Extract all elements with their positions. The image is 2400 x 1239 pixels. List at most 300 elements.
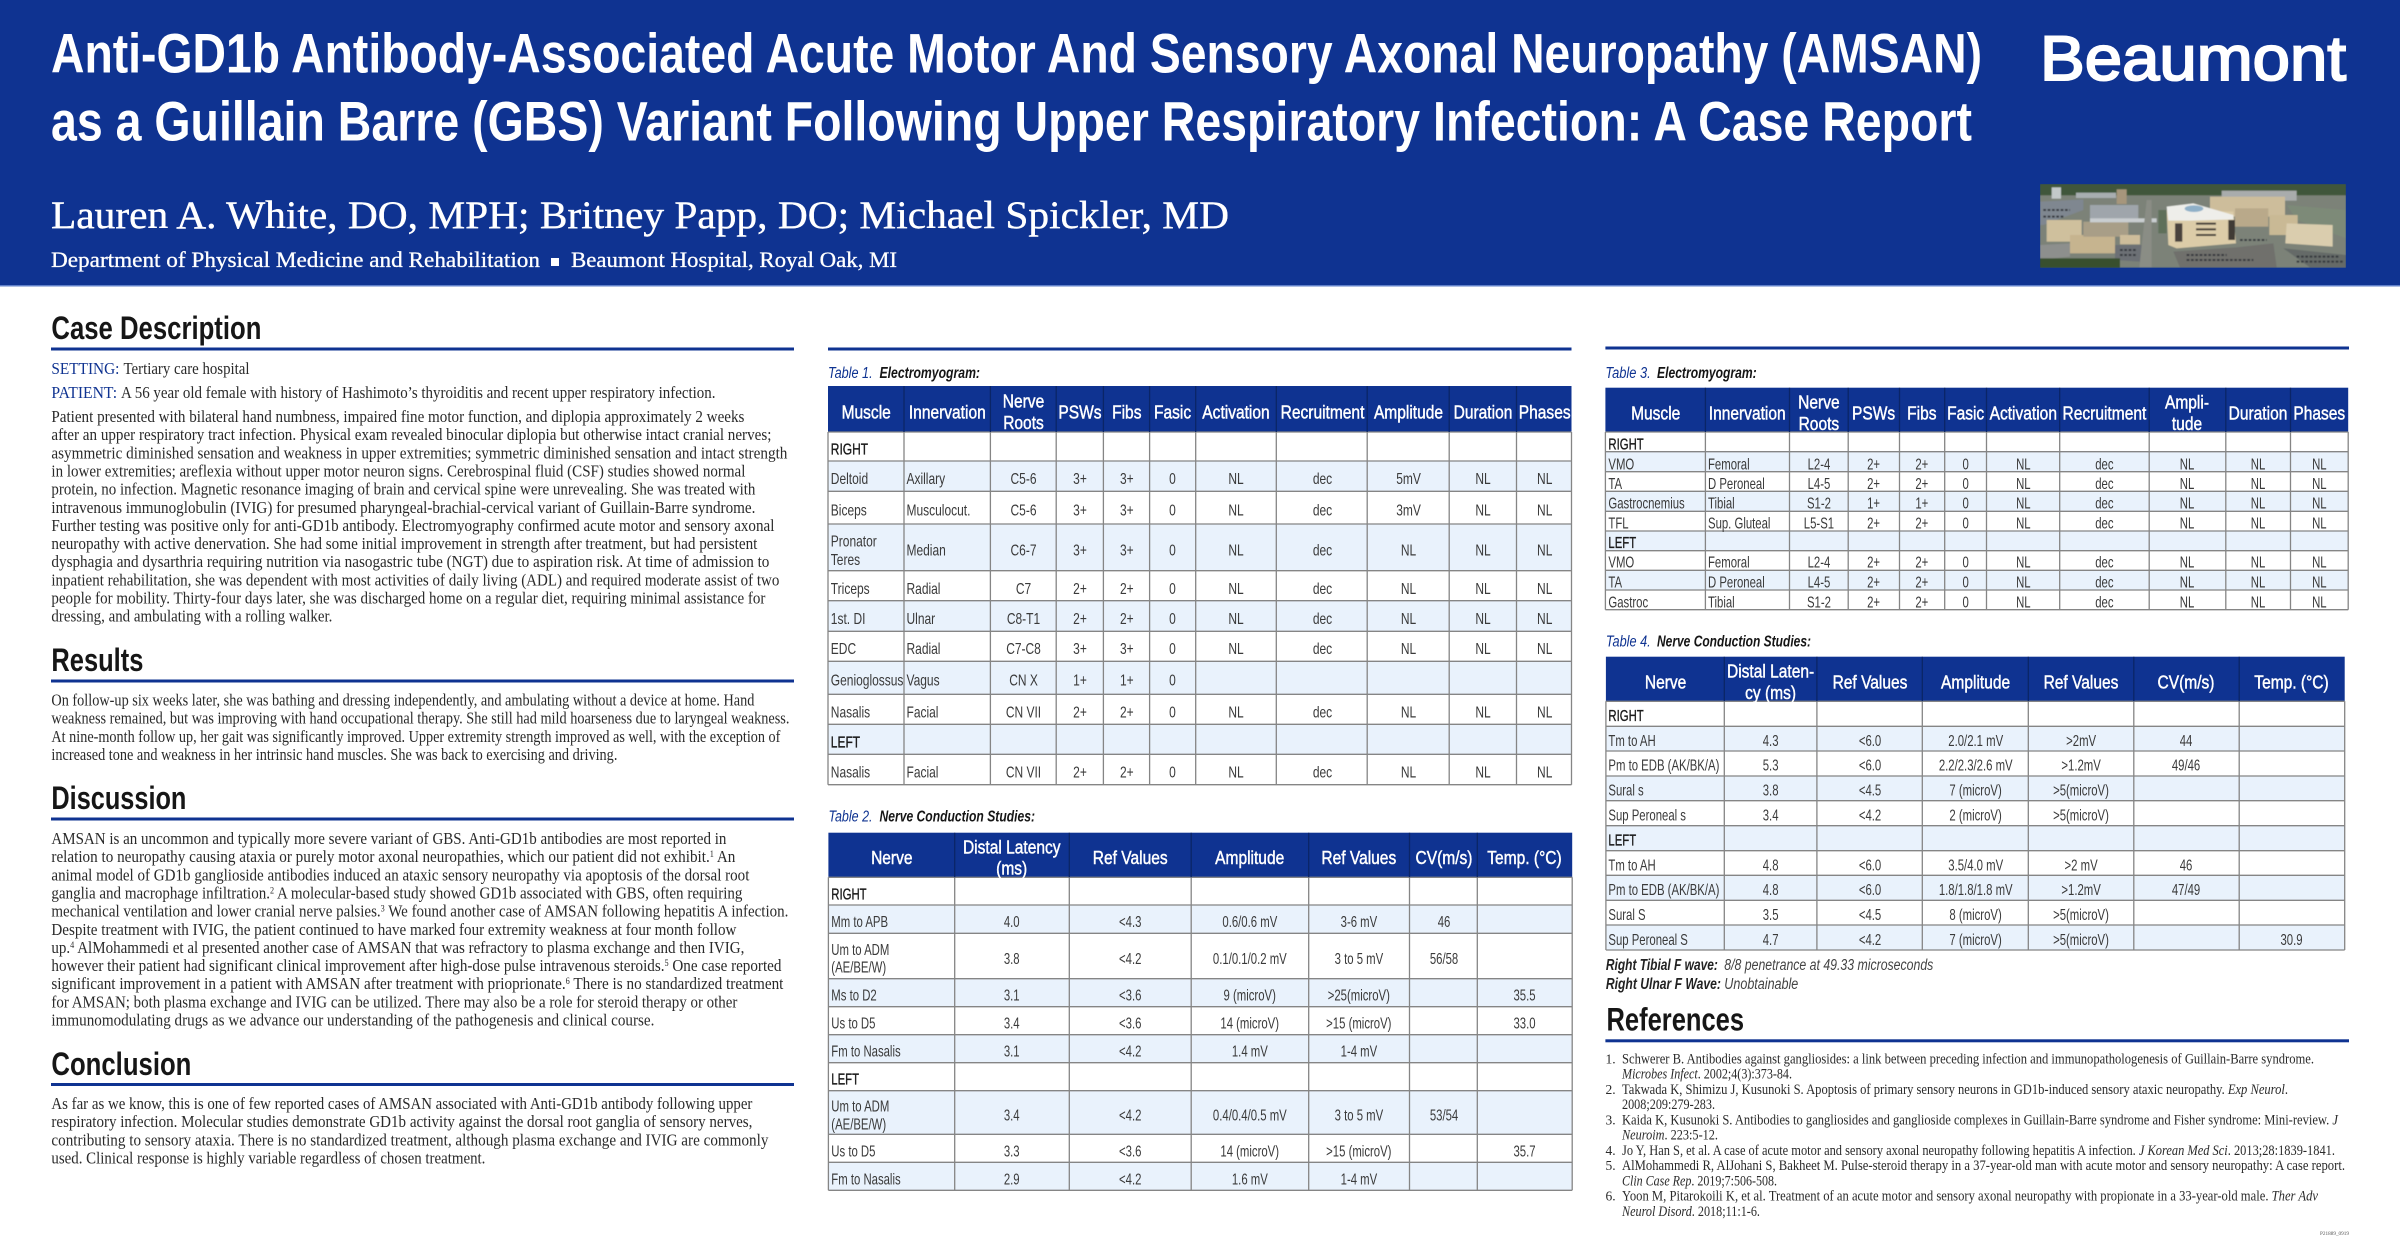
case narrative: Further testing was positive only for anti-GD1b antibody. Electromyography confirmed acute motor and sensory axonal xyxy=(51,516,775,535)
table 2 header row: Nerve xyxy=(871,848,913,868)
heading: Conclusion: Conclusion xyxy=(51,1046,191,1082)
table 4 body rows: Sup Peroneal S xyxy=(1608,930,1688,948)
table 1 body rows: CN VII xyxy=(1006,763,1041,781)
table 1 body rows: NL xyxy=(1228,501,1244,519)
table 2 body rows: Um to ADM xyxy=(831,940,889,958)
table 4 body rows: >5(microV) xyxy=(2053,781,2109,799)
table 4 body rows: >5(microV) xyxy=(2053,905,2109,923)
table 3 body rows: Femoral xyxy=(1708,454,1750,473)
table 1 header row: Nerve xyxy=(1003,391,1044,412)
table 4 body rows: <6.0 xyxy=(1859,731,1881,749)
table 3 header row: Fasic xyxy=(1947,403,1985,424)
table 1 body rows: Deltoid xyxy=(831,469,868,487)
table 4 body rows: 5.3 xyxy=(1763,756,1779,774)
table 2 body rows: 3.3 xyxy=(1004,1141,1020,1160)
table 3 body rows: LEFT xyxy=(1608,533,1637,551)
reference list: Neuroim. 223:5-12. xyxy=(1621,1128,1718,1144)
table 3 body rows: NL xyxy=(2251,592,2266,611)
table 3 body rows: 2+ xyxy=(1915,474,1928,492)
discussion text: We found another case of AMSAN following hepatitis A infection. xyxy=(385,902,788,921)
reference list: Microbes Infect. 2002;4(3):373-84. xyxy=(1621,1067,1792,1083)
table 2 body rows: (AE/BE/W) xyxy=(831,958,886,976)
table 1 body rows: NL xyxy=(1475,541,1491,559)
table 2 body rows xyxy=(831,884,1536,1188)
patient line: PATIENT: xyxy=(51,383,117,402)
table 4 body rows: >2mV xyxy=(2066,731,2097,749)
table 3 body rows: RIGHT xyxy=(1608,434,1644,453)
table 1 body rows: dec xyxy=(1313,469,1332,487)
table 1 body rows: NL xyxy=(1475,501,1491,519)
table 1 body rows: 5mV xyxy=(1396,469,1421,487)
table 4 body rows: 44 xyxy=(2180,731,2193,749)
discussion text: 6 xyxy=(566,976,570,986)
table 3 body rows: 2+ xyxy=(1915,573,1928,591)
table 2 body rows: <3.6 xyxy=(1119,986,1142,1004)
table 1 body rows: NL xyxy=(1475,609,1491,627)
case narrative: people for mobility. Thirty-four days later, she was discharged home on a regular diet, requiring minimal assistance for xyxy=(51,588,766,608)
table 2 body rows: 1.6 mV xyxy=(1232,1169,1268,1188)
table 4 body rows: 47/49 xyxy=(2172,880,2200,898)
table 3 body rows: Sup. Gluteal xyxy=(1708,513,1770,532)
table 1 header row xyxy=(842,391,1571,433)
discussion text: AMSAN is an uncommon and typically more severe variant of GBS. Anti-GD1b antibodies are most reported in xyxy=(51,829,726,848)
table 1 body rows: Genioglossus xyxy=(831,671,903,689)
table 3 body rows: Gastrocnemius xyxy=(1608,494,1685,512)
discussion text: 3 xyxy=(381,904,385,914)
case narrative: in lower extremities; areflexia without upper motor neuron signs. Cerebrospinal fluid (CSF) studies showed normal xyxy=(51,461,746,480)
table 1: electromyogram xyxy=(828,386,1572,785)
table 4 body rows: <4.5 xyxy=(1859,905,1881,923)
heading: Results: Results xyxy=(51,642,143,678)
table 3 body rows: NL xyxy=(2312,474,2327,492)
table 1 body rows: Triceps xyxy=(831,579,870,597)
reference list: Jo Y, Han S, et al. A case of acute motor and sensory axonal neuropathy following hepatitis A infection. J Korean Med Sci. 2013;28:1839-1841. xyxy=(1622,1143,2335,1159)
table 2 body rows: RIGHT xyxy=(831,884,867,903)
table 3 body rows: VMO xyxy=(1608,553,1634,571)
table 3 body rows: TA xyxy=(1608,474,1623,492)
table 1 body rows: NL xyxy=(1537,579,1553,597)
table 2 header row: Ref Values xyxy=(1093,848,1168,868)
discussion text: 5 xyxy=(664,958,669,968)
table 3 body rows: NL xyxy=(2180,474,2195,492)
table 3 header row: Roots xyxy=(1799,414,1839,434)
table 1 body rows: 2+ xyxy=(1073,579,1087,597)
table 4 header row: Amplitude xyxy=(1941,672,2010,693)
results text: At nine-month follow up, her gait was significantly improved. Upper extremity strength improved as well, with the exception of xyxy=(51,727,781,746)
table 2 body rows: 35.7 xyxy=(1514,1141,1536,1160)
table 4 body rows: 3.5/4.0 mV xyxy=(1948,855,2004,874)
table 2 body rows: 4.0 xyxy=(1004,912,1020,930)
table 2 body rows: 0.4/0.4/0.5 mV xyxy=(1213,1105,1287,1124)
discussion text: immunomodulating drugs as we advance our understanding of the pathogenesis and clinical course. xyxy=(51,1010,654,1030)
table 1 body rows: 1+ xyxy=(1120,671,1134,689)
table 1 body rows: NL xyxy=(1228,763,1244,781)
table 4 body rows: 4.7 xyxy=(1763,930,1779,948)
setting line: Tertiary care hospital xyxy=(124,359,250,378)
table 1 body rows: 2+ xyxy=(1120,703,1134,721)
table 1 body rows: 3+ xyxy=(1073,541,1087,559)
table 3 body rows: S1-2 xyxy=(1807,494,1831,512)
reference list: Clin Case Rep. 2019;7:506-508. xyxy=(1622,1173,1777,1189)
table 4 body rows: 49/46 xyxy=(2172,756,2200,774)
table 3 body rows: NL xyxy=(2016,592,2031,611)
table 2 header row: Amplitude xyxy=(1215,848,1284,868)
table 1 body rows: Nasalis xyxy=(831,703,870,721)
table 3 body rows xyxy=(1608,434,2327,611)
table 4 body rows: Pm to EDB (AK/BK/A) xyxy=(1608,880,1719,898)
table 1 body rows: Pronator xyxy=(831,532,877,550)
table 4 body rows: >5(microV) xyxy=(2053,806,2109,824)
table 4 body rows: Tm to AH xyxy=(1608,855,1656,874)
table 3 body rows: NL xyxy=(2312,573,2327,591)
table 4 body rows: Tm to AH xyxy=(1608,731,1656,749)
discussion text: for AMSAN; both plasma exchange and IVIG can be utilized. There may also be a role for steroid therapy or other xyxy=(51,992,738,1011)
table 3 body rows: 2+ xyxy=(1915,513,1928,532)
caption: table 4: Table 4. xyxy=(1606,634,1651,651)
table 4 body rows: 3.5 xyxy=(1763,905,1779,923)
table 4 body rows: 46 xyxy=(2180,855,2193,874)
table 3 body rows: NL xyxy=(2312,454,2327,473)
discussion text: mechanical ventilation and lower cranial nerve palsies. xyxy=(51,902,414,921)
table 1 body rows: NL xyxy=(1537,469,1553,487)
table 1 body rows: NL xyxy=(1228,579,1244,597)
table 1 body rows: NL xyxy=(1401,763,1416,781)
table 1 header row: Fasic xyxy=(1154,402,1192,423)
discussion text: 4 xyxy=(70,940,75,950)
table 2 body rows: 2.9 xyxy=(1004,1169,1020,1188)
table 4 body rows: >1.2mV xyxy=(2061,880,2101,898)
table 2 body rows: Us to D5 xyxy=(831,1141,876,1160)
caption: table 3: Electromyogram: xyxy=(1657,365,1757,382)
table 1 body rows: NL xyxy=(1401,541,1416,559)
table 1 body rows: Teres xyxy=(831,550,860,568)
table 2: nerve conduction studies xyxy=(828,833,1572,1190)
F wave notes xyxy=(1606,957,1933,993)
affiliation: Beaumont Hospital, Royal Oak, MI xyxy=(571,247,897,272)
case narrative: asymmetric diminished sensation and weakness in upper extremities; symmetric diminished sensation and intact strength xyxy=(51,443,788,462)
table 3 body rows: Gastroc xyxy=(1608,592,1648,611)
table 4 header row: Nerve xyxy=(1645,672,1686,693)
table 1 body rows: 3+ xyxy=(1073,639,1087,657)
table 4: nerve conduction studies xyxy=(1606,657,2345,950)
table 2 body rows: 0.1/0.1/0.2 mV xyxy=(1213,949,1287,967)
conclusion text xyxy=(51,1094,769,1167)
table 2 body rows: Um to ADM xyxy=(831,1096,889,1115)
table 2 body rows: 9 (microV) xyxy=(1224,986,1276,1004)
discussion text: animal model of GD1b ganglioside antibodies induced an ataxic sensory neuropathy via apoptosis of the dorsal root xyxy=(51,865,750,884)
table 4 body rows: <6.0 xyxy=(1859,855,1881,874)
panel: results xyxy=(51,642,794,764)
table 2 body rows: >15 (microV) xyxy=(1326,1014,1391,1032)
results text: On follow-up six weeks later, she was bathing and dressing independently, and ambulating without a device at home. Hand xyxy=(51,690,755,710)
table 4 body rows: >1.2mV xyxy=(2061,756,2101,774)
caption: table 4 xyxy=(1606,634,1811,651)
results text: weakness remained, but was improving with hand occupational therapy. She still had mild hoarseness due to laryngeal weakness. xyxy=(51,709,789,728)
table 1 body rows: 0 xyxy=(1169,541,1176,559)
table 2 body rows: 3.4 xyxy=(1004,1014,1020,1032)
table 3 body rows: NL xyxy=(2180,454,2195,473)
table 4 body rows: Sup Peroneal s xyxy=(1608,806,1686,824)
table 4 header row xyxy=(1645,661,2329,703)
table 4 header row: cy (ms) xyxy=(1745,683,1796,703)
table 2 body rows: 46 xyxy=(1438,912,1451,930)
table 2 body rows: >25(microV) xyxy=(1328,986,1390,1004)
table 4 body rows: 7 (microV) xyxy=(1949,930,2002,948)
table 1 body rows: 3+ xyxy=(1120,469,1134,487)
table 2 header row xyxy=(871,837,1562,879)
caption: table 4: Nerve Conduction Studies: xyxy=(1657,634,1811,651)
table 1 body rows: Axillary xyxy=(906,469,946,487)
table 4 body rows: Sural S xyxy=(1608,905,1646,923)
header banner xyxy=(0,0,2400,286)
table 1 body rows: NL xyxy=(1537,763,1553,781)
table 2 body rows: 1-4 mV xyxy=(1341,1042,1378,1060)
table 1 body rows: Vagus xyxy=(906,671,940,689)
table 2 body rows: 14 (microV) xyxy=(1220,1014,1279,1032)
table 1 body rows xyxy=(831,440,1552,781)
case narrative: inpatient rehabilitation, she was dependent with most activities of daily living (ADL) and required moderate assist of two xyxy=(51,570,779,589)
table 3 body rows: L4-5 xyxy=(1808,474,1831,492)
F wave notes: 8/8 penetrance at 49.33 microseconds xyxy=(1724,957,1933,974)
F wave notes: Right Tibial F wave: xyxy=(1606,957,1718,974)
F wave notes: Right Ulnar F Wave: xyxy=(1606,976,1721,993)
table 1 body rows: dec xyxy=(1313,703,1332,721)
table 1 body rows: NL xyxy=(1401,639,1416,657)
table 1 body rows: NL xyxy=(1228,541,1244,559)
table 1 body rows: NL xyxy=(1401,579,1416,597)
table 1 header row: Innervation xyxy=(909,402,986,423)
table 3 body rows: NL xyxy=(2312,553,2327,571)
table 4 body rows: 3.8 xyxy=(1763,781,1779,799)
table 4 body rows: 2.2/2.3/2.6 mV xyxy=(1939,756,2013,774)
setting line xyxy=(51,359,250,378)
table 2 body rows: <4.2 xyxy=(1119,949,1142,967)
table 2 header row: (ms) xyxy=(996,858,1027,879)
heading: Discussion: Discussion xyxy=(51,780,186,816)
table 1 body rows: dec xyxy=(1313,639,1332,657)
table 3 header row xyxy=(1631,392,2345,434)
table 2 body rows: 3 to 5 mV xyxy=(1335,949,1384,967)
table 3 body rows: L4-5 xyxy=(1808,573,1831,591)
panel: case description xyxy=(51,310,794,626)
table 1 body rows: Facial xyxy=(906,703,938,721)
table 2 header row: Distal Latency xyxy=(963,837,1061,858)
results text: increased tone and weakness in her intrinsic hand muscles. She was back to exercising and driving. xyxy=(51,745,617,764)
table 4 header row: Ref Values xyxy=(1833,672,1907,693)
conclusion text: As far as we know, this is one of few reported cases of AMSAN associated with Anti-GD1b antibody following upper xyxy=(51,1094,753,1113)
panel: conclusion xyxy=(51,1046,794,1167)
table 1 body rows: C8-T1 xyxy=(1007,609,1040,627)
discussion text: An xyxy=(714,847,735,866)
table 2 body rows: Fm to Nasalis xyxy=(831,1169,901,1188)
caption: table 2: Table 2. xyxy=(828,809,872,826)
table 3 body rows: NL xyxy=(2251,494,2266,512)
table 1 body rows: 3+ xyxy=(1073,469,1087,487)
table 1 body rows: NL xyxy=(1475,579,1491,597)
table 1 body rows: 0 xyxy=(1169,763,1176,781)
table 3 body rows: Femoral xyxy=(1708,553,1750,571)
discussion text: however their patient had significant clinical improvement after high-dose pulse intravenous steroids. xyxy=(51,956,721,975)
case narrative: intravenous immunoglobulin (IVIG) for presumed pharyngeal-brachial-cervical variant of Guillain-Barre syndrome. xyxy=(51,498,755,517)
table 3 body rows: L5-S1 xyxy=(1804,513,1834,532)
panel: discussion xyxy=(51,780,794,1030)
table 4 body rows: 1.8/1.8/1.8 mV xyxy=(1939,880,2013,898)
table 2 body rows: <3.6 xyxy=(1119,1014,1142,1032)
table 1 body rows: 2+ xyxy=(1073,703,1087,721)
table 3 body rows: S1-2 xyxy=(1807,592,1831,611)
case narrative: Patient presented with bilateral hand numbness, impaired fine motor function, and diplopia approximately 2 weeks xyxy=(51,407,744,426)
table 3 body rows: dec xyxy=(2095,454,2114,473)
table 4 body rows: <6.0 xyxy=(1859,756,1881,774)
table 3 header row: Nerve xyxy=(1798,392,1840,413)
caption: table 1 xyxy=(828,365,980,382)
caption: table 1: Electromyogram: xyxy=(880,365,980,382)
table 2 body rows: >15 (microV) xyxy=(1326,1141,1391,1160)
caption: table 2 xyxy=(828,809,1035,826)
table 2 body rows: 56/58 xyxy=(1430,949,1458,967)
table 2 header row: Temp. (°C) xyxy=(1487,848,1562,868)
table 1 body rows: C7 xyxy=(1016,579,1031,597)
table 3 body rows: L2-4 xyxy=(1808,553,1831,571)
table 1 header row: Duration xyxy=(1454,402,1512,423)
table 2 body rows: LEFT xyxy=(831,1070,859,1088)
title: Anti-GD1b Antibody-Associated Acute Motor And Sensory Axonal Neuropathy (AMSAN) xyxy=(51,22,1982,84)
table 3 body rows: D Peroneal xyxy=(1708,573,1765,591)
table 1 body rows: 1st. DI xyxy=(831,609,865,627)
table 2 body rows: Ms to D2 xyxy=(831,986,877,1004)
table 3 body rows: D Peroneal xyxy=(1708,474,1765,492)
patient line: A 56 year old female with history of Hashimoto’s thyroiditis and recent upper respiratory infection. xyxy=(121,383,716,402)
table 4 body rows: 2.0/2.1 mV xyxy=(1948,731,2004,749)
table 1 body rows: NL xyxy=(1537,501,1553,519)
table 1 body rows: NL xyxy=(1228,609,1244,627)
discussion text: 2 xyxy=(270,885,274,895)
table 1 body rows: 0 xyxy=(1169,703,1176,721)
table 4 body rows: >5(microV) xyxy=(2053,930,2109,948)
table 3 body rows: Tibial xyxy=(1708,592,1735,611)
table 3 body rows: 0 xyxy=(1962,474,1969,492)
table 1 header row: Muscle xyxy=(842,402,891,423)
case narrative: dysphagia and dysarthria requiring nutrition via nasogastric tube (NGT) due to aspiration risk. At time of admission to xyxy=(51,552,769,571)
table 1 body rows: NL xyxy=(1228,703,1244,721)
table 4 body rows: Pm to EDB (AK/BK/A) xyxy=(1608,756,1719,774)
table 1 body rows: NL xyxy=(1228,639,1244,657)
table 4 body rows: 7 (microV) xyxy=(1949,781,2002,799)
table 1 body rows: C6-7 xyxy=(1011,541,1037,559)
reference list: 6. xyxy=(1606,1189,1616,1204)
table 1 header row: Phases xyxy=(1519,402,1571,423)
reference list xyxy=(1606,1051,2345,1220)
table 4 header row: Ref Values xyxy=(2044,672,2118,693)
table 3 body rows: 2+ xyxy=(1867,454,1880,473)
table 3 body rows: 0 xyxy=(1962,553,1969,571)
table 1 body rows: 0 xyxy=(1169,639,1176,657)
table 3 body rows: NL xyxy=(2016,513,2031,532)
table 3 body rows: 2+ xyxy=(1867,573,1880,591)
table 2 body rows: <4.2 xyxy=(1119,1042,1142,1060)
conclusion text: used. Clinical response is highly variable regardless of chosen treatment. xyxy=(51,1148,485,1167)
table 3 header row: Ampli- xyxy=(2165,392,2209,413)
table 1 body rows: Median xyxy=(906,541,946,559)
table 1 body rows: 3mV xyxy=(1396,501,1421,519)
discussion text: relation to neuropathy causing ataxia or purely motor axonal neuropathies, which our patient did not exhibit. xyxy=(51,847,768,866)
table 2 body rows: 1-4 mV xyxy=(1341,1169,1378,1188)
discussion text: ganglia and macrophage infiltration. xyxy=(51,883,291,902)
caption: table 3: Table 3. xyxy=(1605,365,1651,382)
table 2 body rows: 3.1 xyxy=(1004,1042,1020,1060)
print code: P21889_0919 xyxy=(2320,1232,2350,1237)
table 3 body rows: NL xyxy=(2312,592,2327,611)
table 4 body rows: 2 (microV) xyxy=(1949,806,2002,824)
table 2 body rows: 3-6 mV xyxy=(1341,912,1378,930)
caption: table 1: Table 1. xyxy=(828,365,873,382)
table 1 body rows: 3+ xyxy=(1073,501,1087,519)
table 3 body rows: 2+ xyxy=(1915,454,1928,473)
table 3 header row: PSWs xyxy=(1852,403,1895,424)
table 1 body rows: EDC xyxy=(831,639,856,657)
table 2 body rows: <4.2 xyxy=(1119,1169,1142,1188)
table 3 header row: Innervation xyxy=(1709,403,1786,424)
table 3 body rows: NL xyxy=(2180,553,2195,571)
table 2 body rows: 53/54 xyxy=(1430,1105,1458,1124)
table 4 body rows: LEFT xyxy=(1608,830,1637,849)
discussion text xyxy=(51,829,788,1030)
table 3 body rows: NL xyxy=(2016,573,2031,591)
table 3 body rows: 2+ xyxy=(1867,474,1880,492)
table 1 body rows: NL xyxy=(1228,469,1244,487)
table 1 body rows: Facial xyxy=(906,763,938,781)
table 1 body rows: 0 xyxy=(1169,579,1176,597)
table 4 body rows: 4.8 xyxy=(1763,855,1779,874)
table 2 body rows: <4.3 xyxy=(1119,912,1142,930)
table 3 body rows: 2+ xyxy=(1867,513,1880,532)
table 3 body rows: NL xyxy=(2251,573,2266,591)
table 1 body rows: 2+ xyxy=(1120,763,1134,781)
table 3 header row: Activation xyxy=(1990,403,2057,424)
affiliation xyxy=(51,247,897,272)
discussion text: significant improvement in a patient with AMSAN after treatment with prioprionate. xyxy=(51,974,610,993)
table 3 body rows: NL xyxy=(2180,513,2195,532)
discussion text: Despite treatment with IVIG, the patient continued to have marked four extremity weakness at four month follow xyxy=(51,920,736,939)
table 1 body rows: NL xyxy=(1475,703,1491,721)
table 1 body rows: RIGHT xyxy=(831,440,868,458)
table 4 body rows: RIGHT xyxy=(1608,706,1644,724)
heading: References: References xyxy=(1606,1002,1744,1038)
table 3 body rows: NL xyxy=(2180,573,2195,591)
table 3 body rows: NL xyxy=(2016,553,2031,571)
table 1 body rows: 3+ xyxy=(1120,501,1134,519)
results text xyxy=(51,690,789,764)
table 3 body rows: 0 xyxy=(1962,494,1969,512)
table 4 body rows xyxy=(1608,706,2303,948)
table 3 body rows: NL xyxy=(2312,494,2327,512)
authors: Lauren A. White, DO, MPH; Britney Papp, DO; Michael Spickler, MD xyxy=(51,194,1229,237)
table 1 body rows: 2+ xyxy=(1073,609,1087,627)
table 4 body rows: >2 mV xyxy=(2065,855,2098,874)
title: as a Guillain Barre (GBS) Variant Following Upper Respiratory Infection: A Case Report xyxy=(51,90,1972,152)
table 1 body rows: C5-6 xyxy=(1011,469,1037,487)
table 3 body rows: 0 xyxy=(1962,592,1969,611)
table 1 body rows: Radial xyxy=(906,579,940,597)
table 3 body rows: NL xyxy=(2180,494,2195,512)
table 1 body rows: 1+ xyxy=(1073,671,1087,689)
table 3 body rows: TFL xyxy=(1608,513,1629,532)
table 3 body rows: 2+ xyxy=(1867,592,1880,611)
table 3 body rows: 2+ xyxy=(1915,553,1928,571)
table 3 body rows: dec xyxy=(2095,513,2114,532)
table 2 body rows: <4.2 xyxy=(1119,1105,1142,1124)
table 1 body rows: Biceps xyxy=(831,501,867,519)
